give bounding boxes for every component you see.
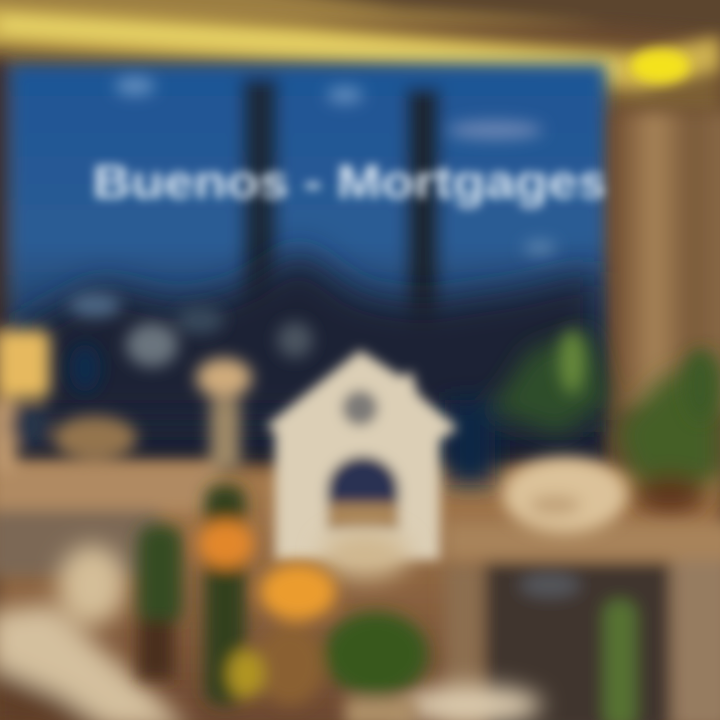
window mullion left <box>242 78 278 353</box>
city skyline <box>15 250 600 420</box>
cream cushion <box>503 457 627 533</box>
icon: house <box>266 350 458 560</box>
panel: window <box>0 60 606 464</box>
title: Buenos - Mortgages <box>92 155 608 208</box>
low warm brown <box>256 625 324 705</box>
sky highlights <box>115 77 556 255</box>
flower yellow low <box>228 650 264 698</box>
pot <box>345 698 415 720</box>
stems left <box>138 525 182 625</box>
green plant <box>324 612 428 696</box>
window frame left <box>0 60 6 330</box>
house round window <box>342 390 378 426</box>
flower orange left <box>198 520 254 568</box>
house arched door <box>327 456 399 530</box>
ceiling light strip <box>0 6 720 90</box>
panel: right shelf and plant <box>445 330 720 515</box>
panel: foreground sofa <box>0 531 542 720</box>
window mullion right <box>406 88 440 363</box>
icon: bright yellow lamp spot <box>630 49 690 83</box>
panel: right sideboard <box>445 522 720 720</box>
panel: wood wall <box>612 112 720 412</box>
lower room backdrop <box>0 470 720 720</box>
flower orange centre <box>260 564 336 620</box>
panel: foreground flowers <box>138 485 428 720</box>
ceiling <box>0 0 720 115</box>
panel: left table and lamp <box>0 330 252 576</box>
